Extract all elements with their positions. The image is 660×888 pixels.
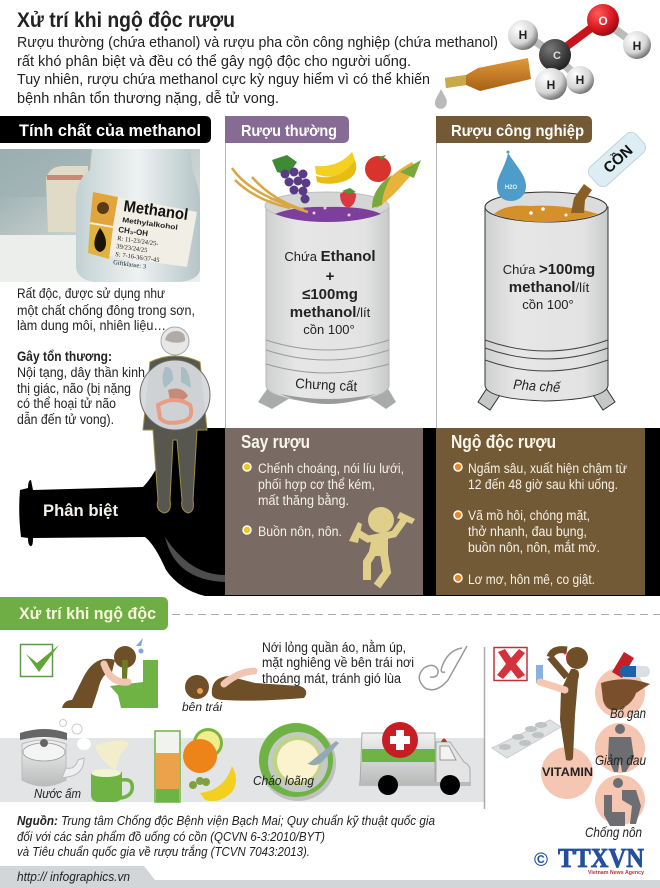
text: methanol uses: một chất chống đông trong sơn, [17,303,195,318]
photo: methanol bottle: S: 7-16-36/37-45 [115,251,160,264]
icon: wind [419,646,467,690]
logo: TTXVN [534,843,644,876]
text: methanol uses [17,286,195,333]
heading: drunkenness: Say rượu [241,432,310,452]
icon: drunk person [349,507,415,586]
text: methanol uses: làm dung môi, nhiên liệu… [17,318,166,333]
bullet list: poisoning symptoms: thở nhanh, đau bụng, [468,524,587,539]
panel: juice and fruit [155,728,236,802]
icon: water drop H2O [497,150,526,201]
label: painkiller: Giảm đau [595,752,646,768]
bullet list: drunkenness symptoms: Buồn nôn, nôn. [258,524,342,539]
icon: banana and kiwi [189,766,236,801]
text: methanol uses: Rất độc, được sử dụng như [17,286,165,301]
gray food band [0,738,484,802]
panel: ordinary alcohol [225,116,421,428]
text: damage caused [17,349,145,427]
illustration: fruit and grains [232,152,421,212]
photo: methanol bottle: Methanol [122,198,189,224]
icon: steaming green cup [91,740,132,802]
text: ordinary alcohol contents: Chứa Ethanol [284,248,376,265]
text: ordinary alcohol contents: methanol/lít [290,304,371,321]
text: damage caused: dẫn đến tử vong). [17,412,114,427]
heading: first aid [0,597,168,630]
vitamin circle [541,747,593,799]
intro text block: bệnh nhân tổn thương nặng, dễ tử vong. [17,90,279,107]
footer bar [0,866,660,888]
icon: methanol molecule and pouring bottle: O [598,14,608,28]
heading: first aid: Xử trí khi ngộ độc [19,605,156,623]
label: blended: Pha chế [513,376,562,395]
panel: thin porridge [253,723,339,801]
logo: TTXVN: Vietnam News Agency [588,870,644,876]
text: industrial alcohol contents: Chứa >100mg [503,261,595,278]
icon: kettle [20,720,91,786]
icon: methanol molecule and pouring bottle: H [519,28,527,42]
illustration: distillation barrel [258,192,396,409]
icon: person swallowing pills [536,647,588,761]
icon: stomach pain [595,723,645,773]
label: liver tonic: Bổ gan [610,705,646,721]
panel: do list [20,638,467,714]
icon: methanol molecule and pouring bottle: H [576,73,584,87]
text: ordinary alcohol contents: + [326,268,335,285]
icon: methanol molecule and pouring bottle: H [633,39,641,53]
icon: cross box [494,648,527,680]
text: damage caused: Gây tổn thương: [17,349,112,364]
label: thin porridge: Cháo loãng [253,774,314,788]
panel: methanol properties [0,116,211,427]
icon: porridge bowl [259,723,339,801]
heading: alcohol poisoning: Ngộ độc rượu [451,432,556,452]
panel: distinguishing bottle [19,428,660,596]
text: industrial alcohol contents: methanol/lít [509,279,590,296]
bullet list: poisoning symptoms: Vã mồ hôi, chóng mặt, [468,508,590,523]
text: sources [17,814,435,859]
intro text block [17,34,498,107]
text: sources: và Tiêu chuẩn quốc gia về rượu trắng (TCVN 7043:2013). [17,844,310,859]
icon: pill blister [492,720,561,758]
photo: methanol bottle [0,149,200,282]
icon: water drop H2O: H2O [505,185,517,191]
icon: vomiting [595,775,645,826]
bullet list: drunkenness symptoms: phối hợp cơ thể kém, [258,477,375,492]
panel: do not list [492,647,650,840]
icon: methanol molecule and pouring bottle: C [553,50,561,62]
text: sources: Nguồn: Trung tâm Chống độc Bệnh viện Bạch Mai; Quy chuẩn kỹ thuật quốc gia [17,814,435,828]
photo: methanol bottle: CH₃-OH [118,225,149,238]
bullet list: drunkenness symptoms: mất thăng bằng. [258,493,349,508]
heading: ordinary alcohol: Rượu thường [241,123,337,140]
text: damage caused: Nội tạng, dây thần kinh [17,365,145,380]
icon: person lying on left side [185,671,306,701]
text: ordinary alcohol contents: cồn 100° [303,322,355,337]
photo: methanol bottle: Giftklasse: 3 [113,259,146,271]
logo: TTXVN: © [534,850,548,871]
icon: alcohol bottle pouring [571,129,648,213]
photo: methanol bottle: Methylalkohol [122,217,178,232]
bullet list: drunkenness symptoms: Chếnh choáng, nói líu lưới, [258,461,404,476]
illustration: mixing barrel [478,192,615,410]
text: damage caused: có thể hoại tử não [17,396,116,411]
icon: ambulance [359,722,471,795]
text: positioning advice [262,640,414,686]
icon: methanol molecule and pouring bottle: H [547,78,555,92]
icon: alcohol bottle pouring: CỒN [600,141,636,177]
bullet list: poisoning symptoms: Lơ mơ, hôn mê, co giật. [468,572,595,587]
photo: methanol bottle: R: 11-23/24/25- [117,235,159,248]
photo: methanol bottle: 39/23/24/25 [116,243,148,254]
bullet list: drunkenness symptoms [243,461,404,539]
text: sources: đối với các sản phẩm đồ uống có cồn (QCVN 6-3:2010/BYT) [17,830,325,844]
icon: methanol molecule and pouring bottle [435,4,651,109]
panel: alcohol poisoning [436,428,645,595]
bullet list: poisoning symptoms [454,461,627,587]
heading: methanol properties [0,116,211,143]
label: left side: bên trái [182,700,222,714]
panel: warm water [20,720,132,802]
icon: person vomiting at toilet [62,638,158,708]
icon: liver painkiller [595,652,650,718]
bullet list: poisoning symptoms: Ngấm sâu, xuất hiện chậm từ [468,461,627,476]
label: distilled: Chưng cất [295,375,358,394]
panel: industrial alcohol [436,116,648,428]
icon: lemon and orange [183,728,223,773]
heading: industrial alcohol [436,116,592,143]
label: warm water: Nước ấm [34,787,81,801]
icon: check box [20,644,59,676]
bullet list: poisoning symptoms: buồn nôn, nôn, mắt mờ. [468,540,600,555]
heading: ordinary alcohol [225,116,349,143]
label: distinguish: Phân biệt [43,502,119,520]
logo: TTXVN: TTXVN [558,843,644,873]
text: industrial alcohol contents: cồn 100° [522,297,574,312]
intro text block: Rượu thường (chứa ethanol) và rượu pha cồn công nghiệp (chứa methanol) [17,34,498,51]
bullet list: poisoning symptoms: 12 đến 48 giờ sau khi uống. [468,477,618,492]
text: ordinary alcohol contents: ≤100mg [302,286,358,303]
intro text block: rất khó phân biệt và đều có thể gây ngộ độc cho người uống. [17,53,411,70]
text: positioning advice: thoáng mát, tránh gió lùa [262,671,401,686]
title: Xử trí khi ngộ độc rượu [17,9,235,32]
text: damage caused: thị giác, não (bị nặng [17,381,131,396]
text: positioning advice: Nới lỏng quần áo, nằm úp, [262,640,406,655]
panel: drunkenness [225,428,423,595]
label: vitamin: VITAMIN [542,767,593,779]
heading: industrial alcohol: Rượu công nghiệp [451,123,584,140]
label: anti-nausea: Chống nôn [585,824,642,840]
icon: juice glass [155,731,180,802]
icon: human body organs [140,327,210,513]
intro text block: Tuy nhiên, rượu chứa methanol cực kỳ nguy hiểm vì có thể khiến [17,71,430,88]
text: industrial alcohol contents [503,261,595,312]
footer url: http:// infographics.vn [17,869,130,884]
heading: methanol properties: Tính chất của methanol [19,122,201,140]
text: positioning advice: mặt nghiêng về bên trái nơi [262,655,414,670]
text: ordinary alcohol contents [284,248,376,337]
